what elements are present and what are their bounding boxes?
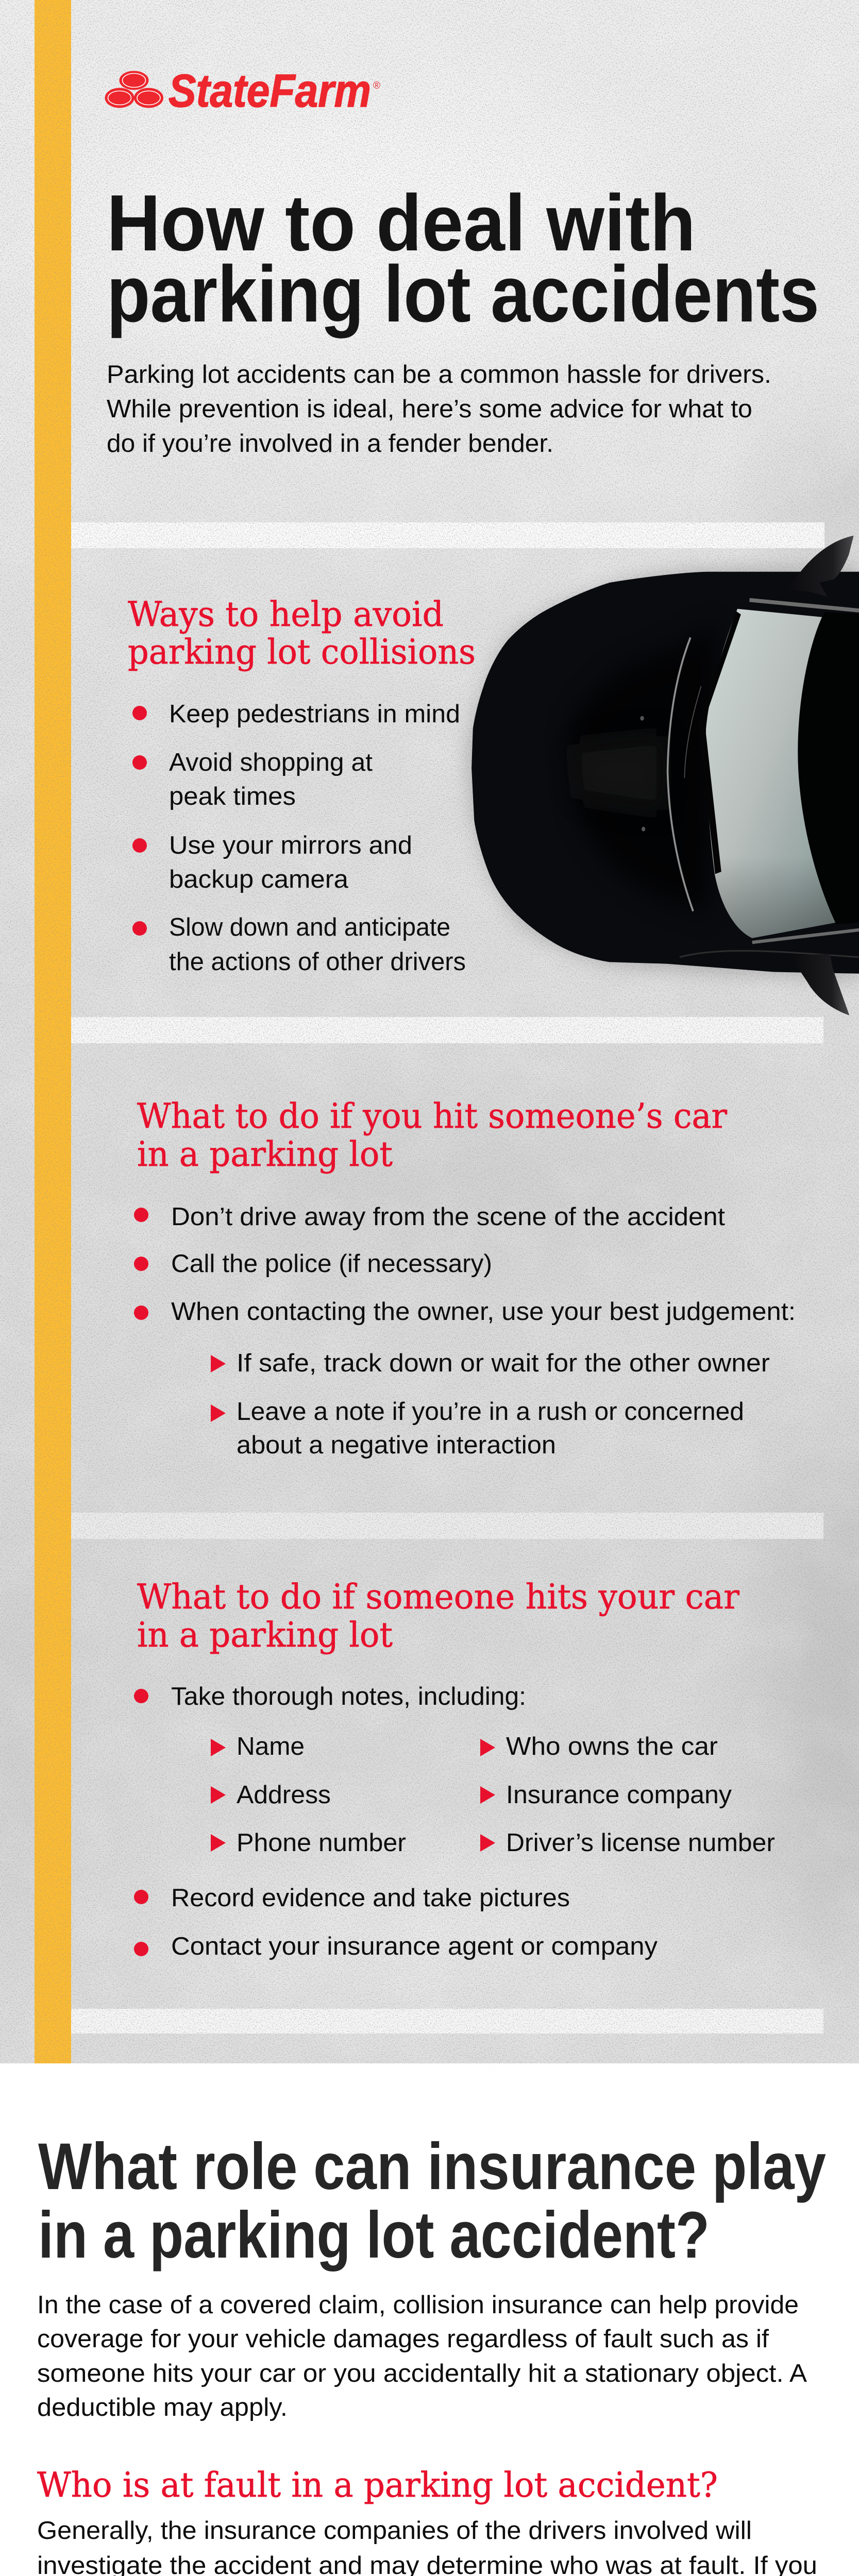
paragraph: fault: Generally, the insurance companies of the drivers involved will [37, 2517, 752, 2545]
bottom pillar [752, 930, 859, 942]
paragraph: collision insurance: coverage for your vehicle damages regardless of fault such as if [37, 2325, 769, 2353]
bullet list [134, 1203, 796, 1326]
heading: What to do if you hit someone’s car [137, 1096, 727, 1136]
bullet list: Call the police (if necessary) [171, 1250, 492, 1278]
heading: What to do if someone hits your car [137, 1577, 739, 1617]
bullet list: backup camera [169, 866, 349, 893]
intro paragraph: Parking lot accidents can be a common hassle for drivers. [107, 361, 771, 388]
bullet: take notes: Take thorough notes, including: [171, 1683, 526, 1710]
heading: Ways to help avoid [128, 595, 444, 634]
paragraph: collision insurance: In the case of a covered claim, collision insurance can help provide [37, 2291, 799, 2319]
panel: if someone hits your car [134, 1577, 775, 1960]
hood washer dots [640, 716, 645, 832]
heading: in a parking lot [137, 1615, 393, 1655]
heading [128, 595, 476, 672]
heading: role of insurance [38, 2130, 826, 2272]
windshield [706, 609, 835, 938]
hood shadow [567, 623, 717, 913]
bullet list: peak times [169, 783, 296, 810]
panel: if you hit someone's car [134, 1096, 796, 1459]
panel: ways to avoid collisions [128, 595, 476, 976]
intro paragraph: do if you’re involved in a fender bender. [107, 430, 553, 457]
notes list right column: Driver’s license number [506, 1829, 775, 1857]
notes list right column [480, 1733, 775, 1857]
heading [137, 1096, 727, 1174]
heading [137, 1577, 739, 1655]
heading: role of insurance: in a parking lot accident? [38, 2198, 710, 2272]
notes list right column: Insurance company [506, 1781, 732, 1809]
intro paragraph: While prevention is ideal, here’s some advice for what to [107, 395, 752, 423]
remaining bullets [134, 1884, 658, 1960]
bottom wing mirror [790, 954, 849, 1015]
yellow curb stripe [35, 0, 71, 2063]
car photo: top view of black car [469, 536, 859, 1015]
side body highlight [680, 951, 859, 957]
sub-bullet list: If safe, track down or wait for the other owner [237, 1349, 770, 1377]
bullet list [132, 700, 466, 976]
paragraph: collision insurance: deductible may apply. [37, 2394, 288, 2421]
car body and hood [471, 572, 859, 974]
title [107, 178, 819, 338]
bullet list: Keep pedestrians in mind [169, 700, 460, 728]
notes list left column [211, 1733, 406, 1857]
paragraph: collision insurance: someone hits your car or you accidentally hit a stationary object. A [37, 2360, 807, 2387]
sub-bullet list: Leave a note if you’re in a rush or concerned [237, 1398, 744, 1426]
title: How to deal with [107, 178, 696, 267]
heading: who is at fault: Who is at fault in a parking lot accident? [37, 2465, 718, 2505]
windshield wipers [684, 611, 741, 874]
heading: parking lot collisions [128, 632, 476, 672]
heading: in a parking lot [137, 1134, 393, 1174]
logo: State Farm: ® [373, 80, 380, 91]
hood edge highlight [668, 637, 693, 911]
bullet list: Slow down and anticipate [169, 913, 450, 941]
bullet list: Don’t drive away from the scene of the accident [171, 1203, 725, 1231]
remaining bullets: Contact your insurance agent or company [171, 1933, 658, 1960]
bullet list: the actions of other drivers [169, 948, 466, 976]
notes list left column: Phone number [237, 1829, 406, 1857]
paragraph: collision insurance [37, 2291, 807, 2421]
top wing mirror [784, 536, 854, 597]
roof [798, 612, 859, 924]
intro paragraph [107, 361, 771, 457]
remaining bullets: Record evidence and take pictures [171, 1884, 570, 1912]
sub-bullet list: about a negative interaction [237, 1431, 556, 1459]
paragraph: fault [37, 2517, 820, 2576]
logo: State Farm: StateFarm [169, 65, 371, 117]
notes list left column: Address [237, 1781, 331, 1809]
bullet list: Avoid shopping at [169, 749, 373, 776]
top pillar [749, 600, 859, 611]
bullet list: Use your mirrors and [169, 832, 412, 859]
notes list right column: Who owns the car [506, 1733, 718, 1760]
sub-bullet list [211, 1349, 770, 1459]
notes list left column: Name [237, 1733, 305, 1760]
bullet list: When contacting the owner, use your best judgement: [171, 1298, 796, 1326]
hood sheen [572, 735, 664, 811]
parking lines [71, 522, 824, 2033]
